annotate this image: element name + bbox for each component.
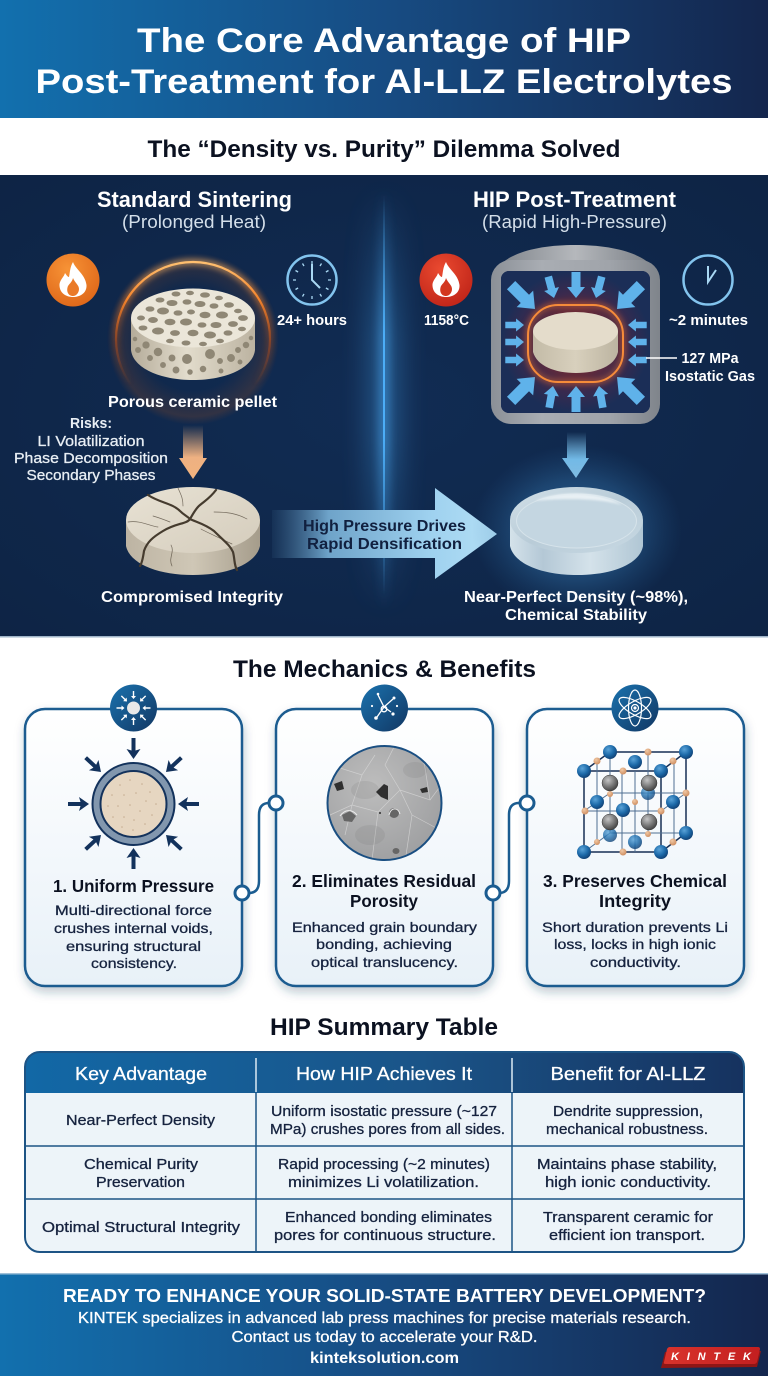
heading: mechanics and benefits: The Mechanics & Benefits xyxy=(233,656,536,683)
panel: card 3 preserves chemical integrity xyxy=(527,684,744,986)
illustration: cracked pellet xyxy=(126,487,260,575)
icon: clock with short duration: ~2 minutes xyxy=(669,312,748,329)
call to action text xyxy=(63,1285,706,1367)
icon: clock with short duration xyxy=(669,256,748,329)
row: optimal structural integrity xyxy=(42,1210,713,1244)
column: HIP post-treatment xyxy=(420,187,755,624)
row: chemical purity preservation: Maintains phase stability, xyxy=(537,1157,717,1173)
subtitle: dilemma heading xyxy=(0,118,768,175)
card body: Multi-directional force xyxy=(55,902,212,918)
call to action text: Contact us today to accelerate your R&D. xyxy=(232,1329,538,1346)
callout: 127 MPa isostatic gas: Isostatic Gas xyxy=(665,369,755,385)
label: near-perfect density xyxy=(464,589,688,624)
row: near-perfect density: Dendrite suppression, xyxy=(553,1104,703,1120)
card body: Short duration prevents Li xyxy=(542,919,728,935)
subtitle: dilemma heading: The “Density vs. Purity” Dilemma Solved xyxy=(148,136,620,163)
row: chemical purity preservation: Chemical Purity xyxy=(84,1157,199,1173)
heading: HIP post-treatment: (Rapid High-Pressure) xyxy=(482,212,667,232)
text block: risks: Risks: xyxy=(70,415,112,432)
arrow: down to cracked pellet xyxy=(179,425,207,479)
row: near-perfect density: MPa) crushes pores from all sides. xyxy=(270,1122,505,1138)
title: The Core Advantage of HIP xyxy=(137,22,631,60)
title: Post-Treatment for Al-LLZ Electrolytes xyxy=(36,63,733,101)
card body: consistency. xyxy=(91,955,177,971)
icon: red flame with temperature xyxy=(420,254,472,329)
card title: 3. Preserves Chemical xyxy=(543,871,727,891)
card body: optical translucency. xyxy=(311,954,458,970)
row: near-perfect density: Near-Perfect Density xyxy=(66,1113,216,1129)
card body: conductivity. xyxy=(590,954,681,970)
arrow: down to dense pellet xyxy=(562,432,589,478)
row: optimal structural integrity: efficient ion transport. xyxy=(549,1228,705,1244)
logo: KINTEK: KINTEK xyxy=(671,1351,752,1363)
heading: standard sintering: (Prolonged Heat) xyxy=(122,212,266,232)
card title: 1. Uniform Pressure xyxy=(53,876,214,896)
heading: standard sintering xyxy=(97,187,292,232)
row: optimal structural integrity: pores for continuous structure. xyxy=(274,1228,496,1244)
row: optimal structural integrity: Optimal Structural Integrity xyxy=(42,1220,241,1236)
card body: ensuring structural xyxy=(66,938,201,954)
illustration: HIP pressure vessel xyxy=(491,245,660,424)
illustration: translucent dense pellet xyxy=(472,445,682,615)
row: near-perfect density xyxy=(66,1104,708,1138)
pressure arrows xyxy=(503,272,649,412)
heading: HIP post-treatment xyxy=(473,187,677,232)
card body xyxy=(292,919,477,970)
footer banner xyxy=(0,1273,768,1376)
card title xyxy=(543,871,727,911)
call to action text: kinteksolution.com xyxy=(310,1350,459,1367)
text block: risks xyxy=(14,415,168,484)
card body: crushes internal voids, xyxy=(54,920,213,936)
arrow: high pressure drives rapid densification xyxy=(272,488,497,579)
icon: orange flame xyxy=(46,254,100,306)
label: porous ceramic pellet: Porous ceramic pellet xyxy=(108,394,277,411)
row: chemical purity preservation: Rapid processing (~2 minutes) xyxy=(278,1157,490,1173)
text block: risks: Phase Decomposition xyxy=(14,450,168,467)
card title: 2. Eliminates Residual xyxy=(292,871,476,891)
text block: risks: Secondary Phases xyxy=(26,467,156,484)
icon: pressure badge xyxy=(110,684,157,732)
logo: KINTEK xyxy=(661,1347,761,1368)
icon: clock with duration: 24+ hours xyxy=(277,312,347,329)
table: HIP summary xyxy=(25,1052,744,1252)
card title xyxy=(292,871,476,911)
row: near-perfect density: mechanical robustness. xyxy=(546,1122,708,1138)
panel: card 2 eliminates residual porosity xyxy=(276,684,493,986)
title xyxy=(36,22,733,101)
card title: Porosity xyxy=(350,891,418,911)
card body: bonding, achieving xyxy=(316,936,452,952)
row: near-perfect density: Uniform isostatic pressure (~127 xyxy=(271,1104,497,1120)
text block: risks: LI Volatilization xyxy=(38,433,144,450)
card title: Integrity xyxy=(599,891,671,911)
column: standard sintering xyxy=(14,187,347,606)
row: chemical purity preservation: minimizes Li volatilization. xyxy=(288,1175,479,1191)
call to action text: READY TO ENHANCE YOUR SOLID-STATE BATTERY DEVELOPMENT? xyxy=(63,1285,706,1306)
header banner xyxy=(0,0,768,118)
row: chemical purity preservation: Preservation xyxy=(96,1175,185,1191)
row: chemical purity preservation: high ionic conductivity. xyxy=(545,1175,711,1191)
icon: red flame with temperature: 1158°C xyxy=(424,313,469,329)
heading: HIP post-treatment: HIP Post-Treatment xyxy=(473,187,677,212)
call to action text: KINTEK specializes in advanced lab press machines for precise materials research. xyxy=(78,1310,691,1327)
arrow: high pressure drives rapid densification: High Pressure Drives xyxy=(303,518,466,535)
connector: card 1 to card 2 xyxy=(235,796,283,900)
label: near-perfect density: Chemical Stability xyxy=(505,607,647,624)
icon: particle network badge xyxy=(361,684,408,732)
illustration: garnet crystal lattice xyxy=(577,745,693,859)
row: optimal structural integrity: Enhanced bonding eliminates xyxy=(285,1210,492,1226)
row: chemical purity preservation xyxy=(84,1157,717,1191)
card body xyxy=(54,902,213,971)
card body: loss, locks in high ionic xyxy=(554,936,716,952)
callout: 127 MPa isostatic gas: 127 MPa xyxy=(682,351,739,367)
arrow: high pressure drives rapid densification: Rapid Densification xyxy=(307,536,462,553)
panel: card 1 uniform pressure xyxy=(25,684,242,986)
table header row: How HIP Achieves It xyxy=(296,1064,472,1084)
label: compromised integrity: Compromised Integrity xyxy=(101,589,283,606)
callout: 127 MPa isostatic gas xyxy=(646,351,755,385)
illustration: SEM micrograph xyxy=(328,745,445,862)
illustration: porous ceramic pellet xyxy=(107,253,279,425)
connector: card 2 to card 3 xyxy=(486,796,534,900)
table header row: Benefit for Al-LLZ xyxy=(550,1064,706,1084)
illustration: compressed particle with arrows xyxy=(68,738,199,869)
label: near-perfect density: Near-Perfect Density (~98%), xyxy=(464,589,688,606)
table header row: Key Advantage xyxy=(75,1064,207,1084)
table header row xyxy=(25,1052,744,1093)
card body: Enhanced grain boundary xyxy=(292,919,477,935)
heading: HIP summary table: HIP Summary Table xyxy=(270,1014,498,1041)
row: optimal structural integrity: Transparent ceramic for xyxy=(543,1210,713,1226)
panel: sintering vs HIP comparison xyxy=(0,175,768,638)
heading: standard sintering: Standard Sintering xyxy=(97,187,292,212)
icon: clock with duration xyxy=(277,256,347,329)
card body xyxy=(542,919,728,970)
icon: atom badge xyxy=(612,684,658,732)
